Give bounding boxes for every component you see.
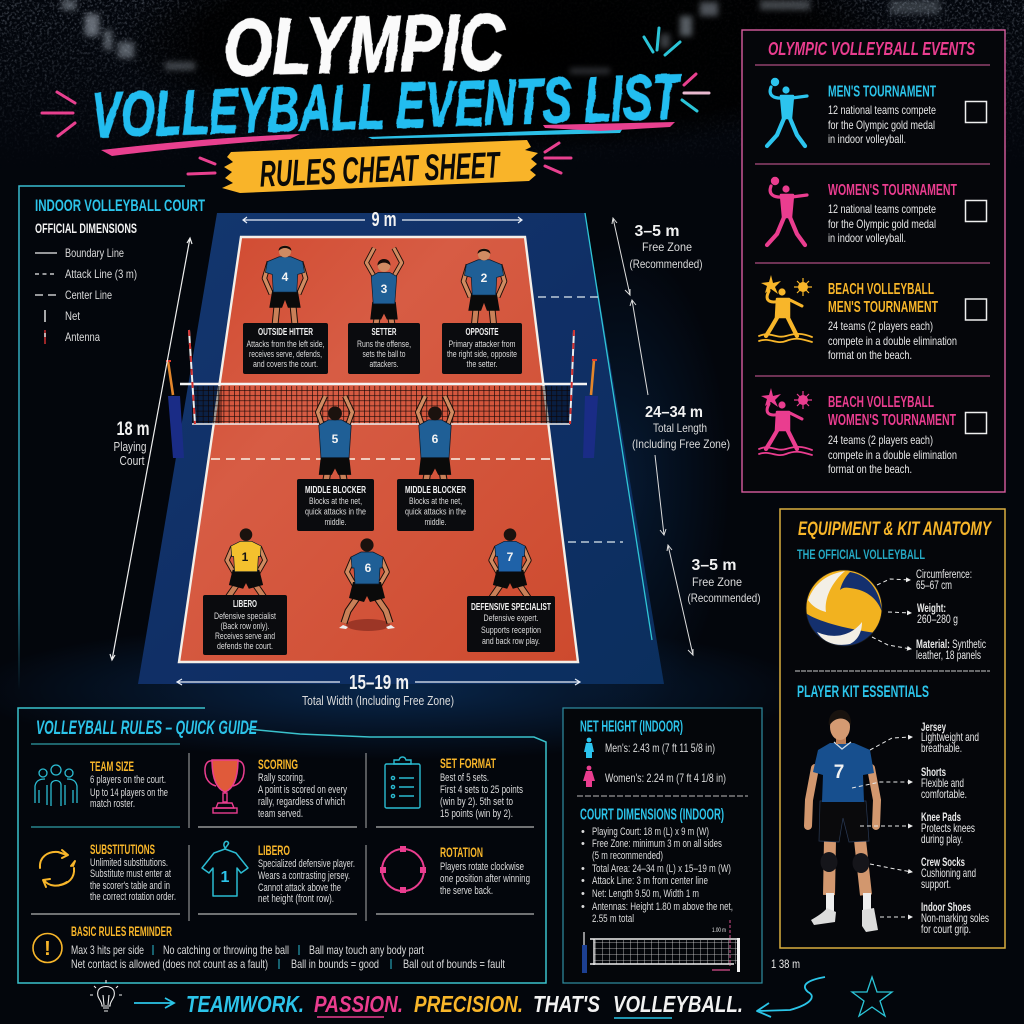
dimension arrow: bottom free zone [667,545,760,655]
rule: scoring: rally, regardless of which [258,796,345,808]
event: beach men's tournament [759,275,986,362]
dimension arrow: total length: (Including Free Zone) [632,437,730,451]
position card: libero: Receives serve and [215,631,275,641]
court dimensions list: 2.55 m total [592,913,634,925]
court dimensions list: Net: Length 9.50 m, Width 1 m [592,888,699,900]
dimension arrow: top free zone [612,218,702,295]
court dimensions list: • [581,901,585,913]
rule: substitutions: Unlimited substitutions. [90,857,168,869]
footer tagline [90,977,892,1018]
back row players [219,528,537,631]
player 2 [463,248,505,336]
position card: outside hitter: and covers the court. [253,359,318,369]
rule: libero: LIBERO [258,842,290,858]
callout: circumference: Circumference: [916,569,972,581]
men's net height: Men's: 2.43 m (7 ft 11 5/8 in) [605,741,715,755]
event: men's tournament: for the Olympic gold medal [828,118,935,132]
callout: weight: 260–280 g [917,614,958,626]
net height heading: NET HEIGHT (INDOOR) [580,718,683,736]
event: beach women's tournament [759,388,986,476]
dimension arrow: 18 m playing court [110,238,192,660]
net with antennas and posts [166,330,598,458]
checkbox [966,200,986,222]
icon: circular arrows [40,850,75,887]
icon: men's player [767,78,807,146]
position card: opposite: OPPOSITE [466,327,499,338]
line legend: Net [65,309,81,323]
position card: libero: defends the court. [217,641,273,651]
icon: women's figure [583,766,595,787]
court dimensions list: Playing Court: 18 m (L) x 9 m (W) [592,826,709,838]
position card: outside hitter: Attacks from the left side, [246,339,324,349]
position card: middle blocker right: MIDDLE BLOCKER [405,485,467,496]
icon: jersey on hanger [202,841,248,896]
player 2: 2 [481,271,488,285]
event: beach women's tournament: compete in a double elimination [828,448,957,462]
court dimensions list: Free Zone: minimum 3 m on all sides [592,838,722,850]
tagline text: THAT'S [533,991,601,1017]
curved arrow [757,977,825,1017]
court dimensions list: • [581,875,585,887]
callout: material [872,637,986,662]
dimension arrow: 9 m: 9 m [372,209,396,231]
panel: indoor volleyball court [19,186,760,708]
dimension arrow: total length: 24–34 m [645,404,703,421]
icon: light bulb [90,980,122,1011]
position card: outside hitter [243,323,328,374]
position card: defensive specialist: and back row play. [482,636,540,646]
position card: defensive specialist: Defensive expert. [484,613,538,623]
illustration: player in kit: 7 [834,762,844,783]
line legend: Boundary Line [65,246,124,260]
callout: crew socks: support. [921,877,951,891]
position card: outside hitter: receives serve, defends, [249,349,322,359]
position card: opposite: the setter. [466,359,498,369]
tagline text: PASSION. [314,991,403,1017]
position card: middle blocker left: MIDDLE BLOCKER [305,485,367,496]
player 6 back row [339,538,395,631]
event: beach men's tournament: compete in a double elimination [828,334,957,348]
event: men's tournament: in indoor volleyball. [828,132,906,146]
court dimensions list: Attack Line: 3 m from center line [592,875,708,887]
dimension arrow: 15-19 m total width [177,672,580,708]
position card: opposite: the right side, opposite [447,349,517,359]
court dimensions list: Antennas: Height 1.80 m above the net, [592,901,733,913]
icon: team [35,765,77,806]
callout: knee pads: Knee Pads [921,810,961,824]
dimension arrow: 18 m playing court: Court [120,453,145,468]
callout: knee pads [860,810,975,846]
position card: setter [348,323,420,374]
position card: libero [203,595,287,655]
event: women's tournament: WOMEN'S TOURNAMENT [828,182,957,199]
callout: material: leather, 18 panels [916,650,981,662]
rule: scoring: team served. [258,808,303,820]
callout: shorts: Shorts [921,765,946,779]
dimension arrow: top free zone: Free Zone [642,240,692,254]
stray measurement label: 1 38 m [771,959,800,971]
callout: weight: Weight: [917,603,946,615]
position card: middle blocker left: quick attacks in the [305,506,366,516]
position card: setter: sets the ball to [362,349,406,359]
callout: jersey: Lightweight and [921,730,979,744]
event: women's tournament: 12 national teams compete [828,202,936,216]
player 4 [264,245,306,333]
position card: middle blocker left: Blocks at the net, [309,496,362,506]
event: beach women's tournament: 24 teams (2 players each) [828,433,933,447]
callout: crew socks: Cushioning and [921,866,976,880]
player 3 [366,248,402,335]
rule: rotation: one position after winning [440,873,530,885]
icon: jersey on hanger: 1 [221,869,230,886]
rule: substitutions: the correct rotation order. [90,891,176,903]
rule: set format: Best of 5 sets. [440,772,489,784]
event: beach men's tournament: 24 teams (2 players each) [828,319,933,333]
event: beach men's tournament: BEACH VOLLEYBALL [828,281,934,298]
tagline text: TEAMWORK. [186,991,304,1017]
rule: scoring: SCORING [258,756,298,772]
net diagram [582,920,740,973]
rule: libero [202,841,355,905]
panel: olympic volleyball events [742,30,1005,492]
checkbox [966,412,986,434]
event: beach men's tournament: MEN'S TOURNAMENT [828,299,938,316]
dimension arrow: bottom free zone: Free Zone [692,575,742,589]
stadium background [0,0,1024,750]
rule: set format [385,755,523,820]
basic rules reminder: Ball in bounds = good [291,957,379,971]
player 7 [483,528,537,614]
icon: trophy [205,760,244,813]
rule: scoring [205,756,347,820]
rule: substitutions: Substitute must enter at [90,868,171,880]
panel: equipment and kit anatomy [780,509,1005,948]
position card: defensive specialist [467,596,555,652]
callout: indoor shoes [880,900,989,936]
basic rules reminder: Ball out of bounds = fault [403,957,506,971]
rule: set format: 15 points (win by 2). [440,808,513,820]
line legend: Attack Line (3 m) [65,267,137,281]
position card: libero: (Back row only). [220,621,270,631]
title [42,0,709,195]
illustration: player in kit [808,710,878,932]
callout: circumference: 65–67 cm [916,580,952,592]
basic rules reminder: Net contact is allowed (does not count as a fault) [71,957,268,971]
callout: shorts [852,765,967,801]
rule: libero: Wears a contrasting jersey. [258,870,350,882]
icon: beach women's player [759,388,812,455]
callout: material: Material: Synthetic [916,639,986,651]
checkbox [966,102,986,122]
event: men's tournament: 12 national teams compete [828,103,936,117]
court dimensions list [581,826,733,925]
court heading: INDOOR VOLLEYBALL COURT [35,196,205,215]
court dimensions heading: COURT DIMENSIONS (INDOOR) [580,806,724,824]
court dimensions list: • [581,826,585,838]
position card: outside hitter: OUTSIDE HITTER [258,327,314,338]
position card: middle blocker right [397,479,474,531]
position card: libero: LIBERO [233,599,257,610]
event: women's tournament: for the Olympic gold medal [828,217,936,231]
panel: volleyball rules quick guide [18,708,546,983]
callout: jersey: breathable. [921,741,962,755]
dimension arrow: 18 m playing court: Playing [114,439,146,454]
event: beach women's tournament: WOMEN'S TOURNAMENT [828,412,956,429]
position card: middle blocker right: middle. [424,517,446,527]
basic rules reminder [33,923,506,971]
rule: rotation: ROTATION [440,844,483,860]
dimension arrow: total length [630,300,730,535]
icon: beach men's player [759,275,812,342]
front row players [264,245,505,336]
basic rules reminder: BASIC RULES REMINDER [71,923,172,939]
rule: libero: Cannot attack above the [258,882,341,894]
rule: team size: match roster. [90,798,135,810]
position card: middle blocker left: middle. [324,517,346,527]
dimension arrow: bottom free zone: (Recommended) [688,591,760,605]
title line: Volleyball Events List: VOLLEYBALL EVENTS LIST [90,61,684,151]
callout: jersey: Jersey [921,720,946,734]
callout: crew socks: Crew Socks [921,855,965,869]
player 4: 4 [282,270,289,284]
event: beach women's tournament: BEACH VOLLEYBALL [828,394,934,411]
rule: team size: TEAM SIZE [90,758,134,774]
panel: net height and court dimensions [563,708,762,983]
event: beach men's tournament: format on the beach. [828,348,912,362]
icon: star [852,977,892,1016]
icon: women's player [767,177,807,245]
rule: team size: 6 players on the court. [90,774,166,786]
tagline text [186,991,743,1018]
banner: rules cheat sheet: RULES CHEAT SHEET [259,144,502,195]
arrow [134,998,174,1008]
player 3: 3 [381,282,388,296]
callout: shorts: Flexible and [921,776,964,790]
tagline text: PRECISION. [414,991,523,1017]
callout: indoor shoes: Non-marking soles [921,911,989,925]
volleyball subheading: THE OFFICIAL VOLLEYBALL [797,546,925,562]
position card: defensive specialist: Supports reception [481,625,541,635]
rule: scoring: Rally scoring. [258,772,305,784]
rule: substitutions: SUBSTITUTIONS [90,841,155,857]
rule: team size: Up to 14 players on the [90,787,168,799]
basic rules reminder: Max 3 hits per side [71,943,144,957]
court dimensions list: • [581,838,585,850]
event: beach women's tournament: format on the beach. [828,462,912,476]
court dimensions list: (5 m recommended) [592,850,663,862]
player 7: 7 [507,550,514,564]
player 6 back row: 6 [365,561,372,575]
callout: jersey [870,720,979,755]
icon: warning circle [33,934,62,962]
position card: opposite: Primary attacker from [448,339,516,349]
kit subheading: PLAYER KIT ESSENTIALS [797,682,929,701]
position card: libero: Defensive specialist [214,611,276,621]
callout: shorts: comfortable. [921,787,967,801]
rule: rotation: Players rotate clockwise [440,861,524,873]
icon: volleyball [800,570,882,650]
court floor [138,213,664,684]
banner: rules cheat sheet [222,140,538,195]
sparkle accents [42,28,709,174]
icon: rotation ring [380,846,426,893]
callout: crew socks [870,855,976,891]
court dimensions list: • [581,863,585,875]
court subheading: OFFICIAL DIMENSIONS [35,221,137,236]
rule: set format: First 4 sets to 25 points [440,784,523,796]
position card: middle blocker right: Blocks at the net, [409,496,462,506]
callout: indoor shoes: for court grip. [921,922,971,936]
rule: substitutions: the scorer's table and in [90,880,170,892]
callout: indoor shoes: Indoor Shoes [921,900,971,914]
net diagram: 1.00 m [712,927,726,934]
event: women's tournament [767,177,986,245]
line legend: Center Line [65,288,112,302]
callout: circumference [877,569,972,592]
dimension arrow: 15-19 m total width: Total Width (Including Free Zone) [302,694,454,708]
rules heading: VOLLEYBALL RULES – QUICK GUIDE [36,718,258,739]
icon: warning circle: ! [44,938,51,960]
women's net height: Women's: 2.24 m (7 ft 4 1/8 in) [605,771,726,785]
tagline text: VOLLEYBALL. [613,991,743,1017]
dimension arrow: top free zone: (Recommended) [630,257,702,271]
basic rules reminder: Ball may touch any body part [309,943,424,957]
callout: knee pads: Protects knees [921,821,975,835]
court dimensions list: Total Area: 24–34 m (L) x 15–19 m (W) [592,863,731,875]
rule: scoring: A point is scored on every [258,784,347,796]
middle row players [318,396,452,492]
basic rules reminder: No catching or throwing the ball [163,943,289,957]
player 1 libero: 1 [242,550,249,564]
position card: opposite [442,323,522,374]
dimension arrow: 18 m playing court: 18 m [116,419,150,440]
icon: men's figure [584,738,594,758]
callout: knee pads: during play. [921,832,963,846]
dimension arrow: top free zone: 3–5 m [634,223,680,240]
position card: setter: Runs the offense, [357,339,411,349]
rule: rotation [380,844,530,897]
rule: rotation: the serve back. [440,885,493,897]
dimension arrow: 15-19 m total width: 15–19 m [349,672,409,694]
callout: weight [888,603,958,626]
line legend: Antenna [65,330,100,344]
icon: clipboard [385,757,420,808]
position card: setter: attackers. [370,359,398,369]
court dimensions list: • [581,888,585,900]
event: women's tournament: in indoor volleyball. [828,231,906,245]
event: men's tournament [767,78,986,146]
line legend [35,246,137,344]
dimension arrow: bottom free zone: 3–5 m [692,557,736,574]
checkbox [966,299,986,320]
brush underlines [101,122,675,156]
rule: set format: SET FORMAT [440,755,496,771]
dimension arrow: total length: Total Length [653,421,707,435]
player 1 libero [219,528,273,614]
rule: team size [35,758,168,810]
position card: middle blocker left [297,479,374,531]
position card: middle blocker right: quick attacks in the [405,506,466,516]
position card: defensive specialist: DEFENSIVE SPECIALIST [471,602,551,613]
rule: libero: Specialized defensive player. [258,858,355,870]
rule: set format: (win by 2). 5th set to [440,796,513,808]
player 6 at net: 6 [432,432,439,446]
player 5: 5 [332,432,339,446]
position card: setter: SETTER [372,327,397,338]
event: men's tournament: MEN'S TOURNAMENT [828,84,936,100]
rule: libero: net height (front row). [258,893,334,905]
dimension arrow: 9 m [243,209,522,231]
rule: substitutions [40,841,176,903]
